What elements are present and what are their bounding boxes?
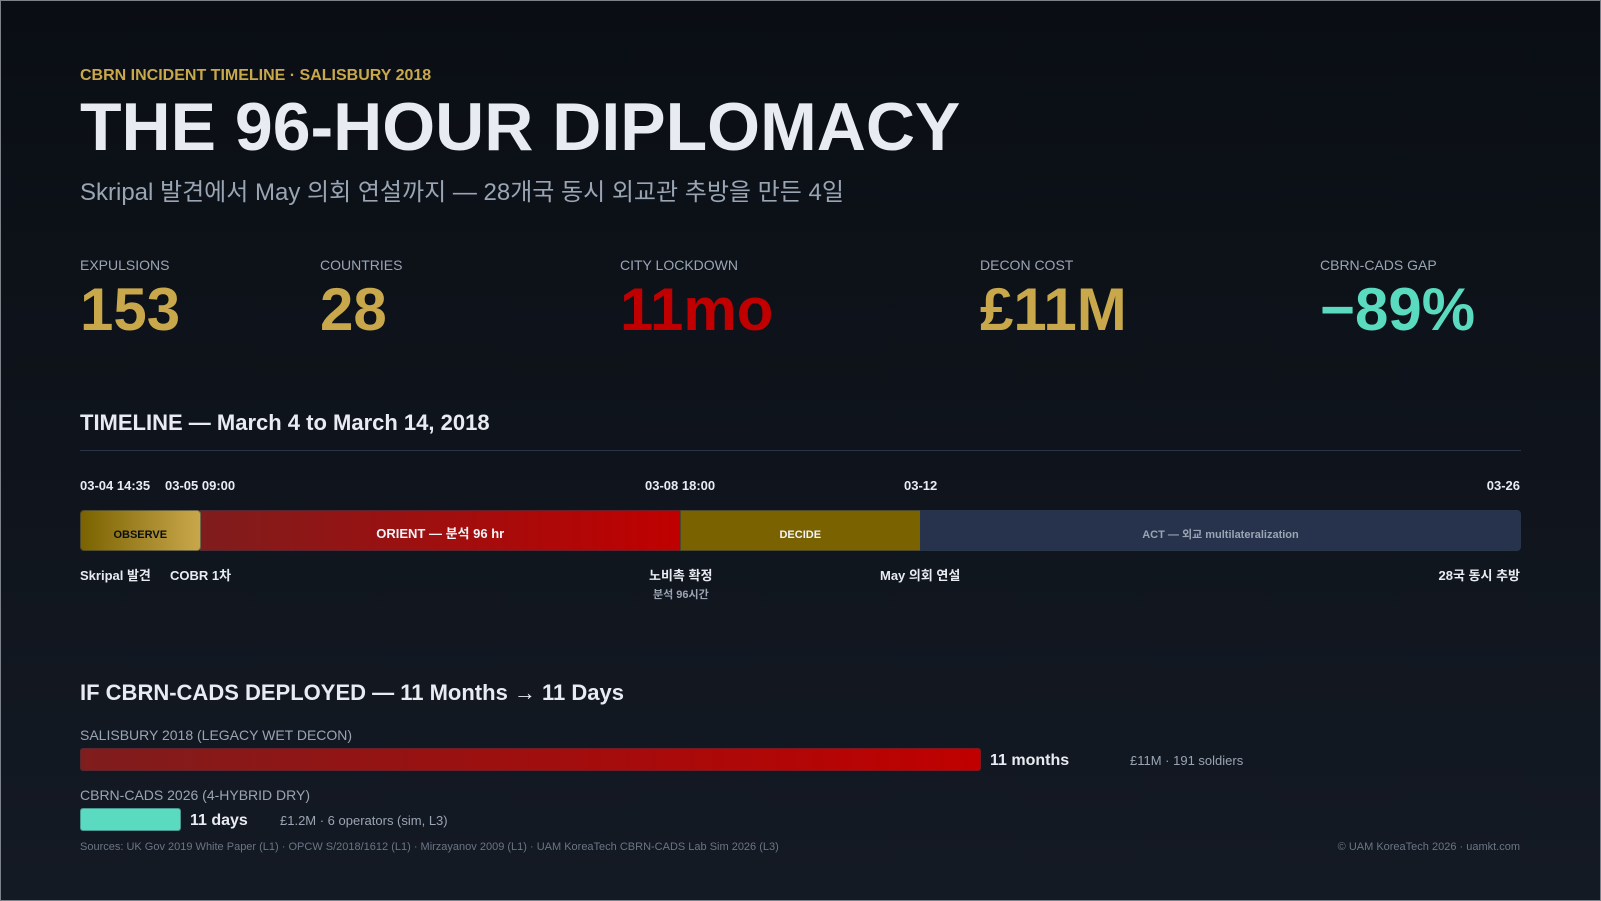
phase: observe — [80, 510, 200, 551]
date ticks: 03-08 18:00 — [645, 478, 715, 493]
stat: expulsions: 153 — [80, 276, 180, 343]
title: THE 96-HOUR DIPLOMACY — [80, 89, 960, 165]
phase: orient: ORIENT — 분석 96 hr — [376, 526, 504, 541]
date ticks — [80, 478, 1520, 493]
stat: countries — [320, 257, 402, 343]
copyright: © UAM KoreaTech 2026 · uamkt.com — [1338, 841, 1520, 853]
stat: decon cost: £11M — [980, 276, 1127, 343]
phase bar — [80, 510, 1521, 551]
event labels: 노비촉 확정 — [649, 568, 712, 583]
date ticks: 03-26 — [1487, 478, 1520, 493]
date ticks: 03-12 — [904, 478, 937, 493]
phase: observe: OBSERVE — [113, 529, 167, 541]
bar: 11 days — [80, 808, 180, 830]
timeline heading: TIMELINE — March 4 to March 14, 2018 — [80, 410, 490, 435]
event labels: 28국 동시 추방 — [1439, 568, 1520, 583]
timeline — [80, 478, 1521, 601]
phase: orient — [200, 510, 680, 551]
row: Salisbury 2018: 11 months — [990, 752, 1069, 769]
row: Salisbury 2018 — [80, 727, 1243, 771]
row: Salisbury 2018: SALISBURY 2018 (LEGACY WET DECON) — [80, 727, 352, 743]
stat: expulsions: EXPULSIONS — [80, 257, 169, 273]
stat: CBRN-CADS gap: −89% — [1320, 276, 1475, 343]
eyebrow: CBRN INCIDENT TIMELINE · SALISBURY 2018 — [80, 67, 431, 84]
event labels: May 의회 연설 — [880, 568, 960, 583]
stat: countries: 28 — [320, 276, 387, 343]
row: CBRN-CADS 2026 — [80, 787, 448, 831]
stat: countries: COUNTRIES — [320, 257, 402, 273]
phase: act: ACT — 외교 multilateralization — [1142, 529, 1299, 541]
date ticks: 03-05 09:00 — [165, 478, 235, 493]
subtitle: Skripal 발견에서 May 의회 연설까지 — 28개국 동시 외교관 추방을 만든 4일 — [80, 179, 844, 206]
bar: 11 months — [80, 748, 980, 770]
stat: city lockdown: CITY LOCKDOWN — [620, 257, 738, 273]
row: Salisbury 2018: £11M · 191 soldiers — [1130, 753, 1243, 768]
date ticks: 03-04 14:35 — [80, 478, 150, 493]
event labels: 분석 96시간 — [653, 589, 709, 601]
event labels: COBR 1차 — [170, 568, 231, 583]
event labels: Skripal 발견 — [80, 568, 151, 583]
row: CBRN-CADS 2026: CBRN-CADS 2026 (4-HYBRID DRY) — [80, 787, 310, 803]
row: CBRN-CADS 2026: £1.2M · 6 operators (sim, L3) — [280, 813, 448, 828]
phase: act — [920, 510, 1521, 551]
stat: decon cost: DECON COST — [980, 257, 1073, 273]
stat: CBRN-CADS gap: CBRN-CADS GAP — [1320, 257, 1437, 273]
row: CBRN-CADS 2026: 11 days — [190, 812, 248, 829]
event labels — [80, 568, 1520, 601]
sources: Sources: UK Gov 2019 White Paper (L1) · OPCW S/2018/1612 (L1) · Mirzayanov 2009 (L1) · UAM KoreaTech CBRN-CADS Lab Sim 2026 (L3) — [80, 841, 779, 853]
comparison heading: IF CBRN-CADS DEPLOYED — 11 Months → 11 Days — [80, 680, 624, 705]
phase: decide: DECIDE — [779, 529, 821, 541]
phase: decide — [680, 510, 920, 551]
stat: city lockdown: 11mo — [620, 276, 773, 343]
